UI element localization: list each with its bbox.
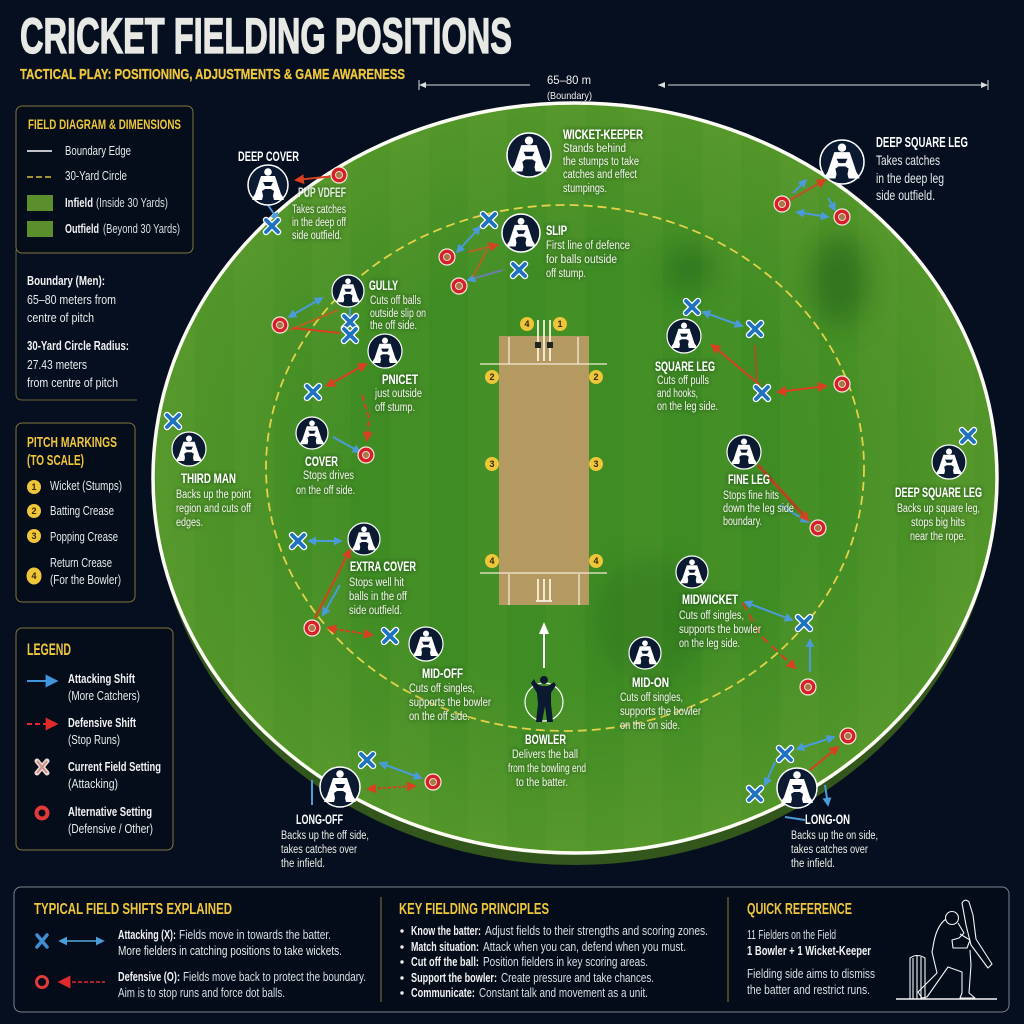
typical field shifts: Attacking (X):: [118, 927, 176, 942]
key fielding principles: [399, 901, 708, 1000]
panel: pitch markings: Return Crease: [50, 555, 112, 570]
quick reference: QUICK REFERENCE: [747, 901, 852, 918]
typical field shifts: TYPICAL FIELD SHIFTS EXPLAINED: [34, 901, 232, 918]
quick reference: 11 Fielders on the Field: [747, 927, 836, 942]
position: bowler: from the bowling end: [508, 763, 586, 775]
position: long-on: takes catches over: [791, 844, 868, 856]
panel: pitch markings: 3: [31, 531, 37, 541]
panel: field diagram and dimensions: 30-Yard Circle: [65, 168, 127, 183]
panel: pitch markings: 4: [31, 571, 37, 581]
panel: field diagram and dimensions: centre of pitch: [27, 310, 94, 325]
boundary dimension: 65–80 m: [547, 73, 591, 87]
pitch: [480, 317, 607, 605]
pitch number badges: 4: [524, 319, 530, 329]
panel: legend: LEGEND: [27, 640, 71, 659]
position: mid-on: on the on side.: [620, 720, 680, 732]
panel: field diagram and dimensions: from centre of pitch: [27, 375, 118, 390]
key fielding principles: Position fielders in key scoring areas.: [483, 954, 648, 969]
position: deep square leg (lower): DEEP SQUARE LEG: [895, 485, 982, 500]
position: cover: COVER: [305, 454, 338, 469]
position: mid-on: [620, 637, 701, 732]
position: slip: for balls outside: [546, 254, 617, 266]
panel: pitch markings: Batting Crease: [50, 503, 114, 518]
position: gully: [332, 275, 426, 332]
fielding markers: current setting X: [167, 214, 974, 800]
panel: field diagram and dimensions: 65–80 meters from: [27, 292, 116, 307]
subtitle: TACTICAL PLAY: POSITIONING, ADJUSTMENTS & GAME AWARENESS: [20, 66, 405, 83]
position: third man: region and cuts off: [176, 503, 252, 515]
position: wicket-keeper: the stumps to take: [563, 156, 639, 168]
position: extra cover: [348, 523, 416, 617]
position: bowler: BOWLER: [525, 732, 566, 747]
position: square leg: SQUARE LEG: [655, 359, 715, 374]
stumps: [535, 320, 553, 601]
position: gully: GULLY: [369, 278, 398, 293]
quick reference: 1 Bowler + 1 Wicket-Keeper: [747, 943, 871, 958]
position: wicket-keeper: [507, 127, 643, 195]
position: deep square leg (lower): [895, 445, 982, 543]
key fielding principles: Support the bowler:: [411, 970, 497, 985]
position: extra cover: Stops well hit: [349, 577, 405, 589]
panel: field diagram and dimensions: Outfield: [65, 221, 99, 236]
panel: field diagram and dimensions: [16, 106, 193, 400]
pitch number badges: 2: [489, 372, 495, 382]
key fielding principles: Know the batter:: [411, 923, 481, 938]
position: wicket-keeper: stumpings.: [563, 183, 607, 195]
position: deep cover: DEEP COVER: [238, 149, 299, 164]
panel: legend: [16, 628, 173, 850]
panel: field diagram and dimensions: (Inside 30 Yards): [96, 195, 168, 210]
panel: legend: Attacking Shift: [68, 671, 135, 686]
panel: field diagram and dimensions: Infield: [65, 195, 93, 210]
position: mid-on: Cuts off singles,: [620, 692, 683, 704]
panel: legend: (Stop Runs): [68, 732, 120, 747]
position: long-on: [777, 768, 878, 870]
quick reference: Fielding side aims to dismiss: [747, 966, 875, 981]
position: long-off: [281, 767, 369, 870]
position: point: [368, 334, 422, 414]
position: midwicket: Cuts off singles,: [679, 610, 744, 622]
position: deep square leg (lower): near the rope.: [910, 531, 966, 543]
position: deep cover: Takes catches: [292, 204, 346, 216]
panel: pitch markings: PITCH MARKINGS: [27, 434, 117, 451]
position: long-off: Backs up the off side,: [281, 830, 369, 842]
position: extra cover: side outfield.: [349, 605, 402, 617]
pitch number badges: 4: [489, 556, 495, 566]
position: midwicket: MIDWICKET: [682, 592, 739, 607]
position: long-on: Backs up the on side,: [791, 830, 878, 842]
pitch number badges: 2: [593, 372, 599, 382]
position: square leg: and hooks,: [657, 388, 698, 400]
typical field shifts: Fields move back to protect the boundary.: [183, 969, 366, 984]
panel: bottom explanation bar: [14, 887, 1009, 1012]
typical field shifts: Defensive (O):: [118, 969, 180, 984]
panel: legend: Current Field Setting: [68, 759, 161, 774]
position: mid-off: supports the bowler: [409, 697, 491, 709]
position: bowler: [508, 676, 586, 789]
position: deep square leg (lower): Backs up square leg,: [897, 503, 980, 515]
position: wicket-keeper: WICKET-KEEPER: [563, 127, 643, 142]
panel: field diagram and dimensions: FIELD DIAGRAM & DIMENSIONS: [28, 117, 181, 132]
position: slip: SLIP: [546, 223, 567, 238]
panel: legend: (More Catchers): [68, 688, 140, 703]
position: square leg: [655, 319, 718, 413]
position: wicket-keeper: catches and effect: [563, 169, 638, 181]
panel: legend: (Defensive / Other): [68, 821, 153, 836]
position: long-on: LONG-ON: [805, 812, 850, 827]
fielding markers: alternative setting O: [272, 167, 856, 790]
pitch number badges: 1: [557, 319, 563, 329]
position: fine leg: FINE LEG: [728, 472, 770, 487]
position: slip: First line of defence: [546, 240, 630, 252]
panel: field diagram and dimensions: Boundary (Men):: [27, 273, 105, 288]
panel: field diagram and dimensions: Boundary Edge: [65, 143, 131, 158]
position: fine leg: [723, 435, 794, 528]
position: third man: edges.: [176, 517, 203, 529]
quick reference: the batter and restrict runs.: [747, 982, 870, 997]
position: gully: the off side.: [370, 320, 417, 332]
pitch number badges: 4: [593, 556, 599, 566]
position: fine leg: down the leg side: [723, 503, 794, 515]
panel: pitch markings: 1: [31, 482, 37, 492]
position: midwicket: [676, 556, 761, 650]
position: mid-on: MID-ON: [632, 675, 669, 690]
key fielding principles: Attack when you can, defend when you must.: [483, 939, 686, 954]
position: slip: [502, 214, 630, 280]
panel: pitch markings: (For the Bowler): [50, 572, 121, 587]
quick reference: [747, 901, 875, 997]
position: point: PNICET: [382, 372, 419, 387]
position: deep cover: PUP VDFEF: [298, 185, 346, 200]
panel: legend: Defensive Shift: [68, 715, 136, 730]
pitch number badges: 3: [489, 459, 495, 469]
position: mid-off: Cuts off singles,: [409, 683, 475, 695]
panel: pitch markings: [16, 423, 135, 602]
position: cover: [296, 417, 355, 497]
key fielding principles: Adjust fields to their strengths and scoring zones.: [485, 923, 708, 938]
panel: legend: Alternative Setting: [68, 804, 152, 819]
position: long-off: LONG-OFF: [296, 812, 343, 827]
boundary dimension: [419, 73, 988, 102]
position: mid-off: on the off side.: [409, 711, 470, 723]
position: long-off: the infield.: [281, 858, 325, 870]
key fielding principles: KEY FIELDING PRINCIPLES: [399, 901, 549, 918]
position: point: just outside: [374, 388, 422, 400]
position: gully: outside slip on: [370, 308, 426, 320]
position: deep square leg (upper): DEEP SQUARE LEG: [876, 134, 968, 151]
position: fine leg: boundary.: [723, 516, 762, 528]
pitch number badges: [485, 317, 603, 568]
pitch number badges: 3: [593, 459, 599, 469]
position: bowler: to the batter.: [516, 777, 568, 789]
position: gully: Cuts off balls: [370, 295, 421, 307]
position: extra cover: balls in the off: [349, 591, 408, 603]
panel: field diagram and dimensions: 27.43 meters: [27, 357, 87, 372]
position: extra cover: EXTRA COVER: [350, 559, 416, 574]
position: third man: [172, 432, 252, 529]
position: deep cover: side outfield.: [292, 230, 342, 242]
position: third man: THIRD MAN: [181, 471, 236, 486]
position: long-off: takes catches over: [281, 844, 357, 856]
key fielding principles: Cut off the ball:: [411, 954, 479, 969]
panel: field diagram and dimensions: (Beyond 30 Yards): [103, 221, 180, 236]
key fielding principles: Communicate:: [411, 985, 475, 1000]
position: point: off stump.: [375, 402, 415, 414]
position: deep square leg (lower): stops big hits: [911, 517, 965, 529]
position: midwicket: on the leg side.: [679, 638, 740, 650]
position: deep cover: [238, 149, 347, 242]
position: deep square leg (upper): side outfield.: [876, 187, 935, 203]
panel: legend: (Attacking): [68, 776, 118, 791]
bowling direction arrow: [539, 622, 549, 668]
position: deep square leg (upper): in the deep leg: [876, 170, 944, 186]
position: deep square leg (upper): [820, 134, 968, 203]
typical field shifts: Fields move in towards the batter.: [179, 927, 331, 942]
position: bowler: Delivers the ball: [512, 749, 578, 761]
panel: pitch markings: 2: [31, 506, 37, 516]
position: cover: Stops drives: [303, 470, 354, 482]
position: cover: on the off side.: [296, 485, 355, 497]
position: square leg: on the leg side.: [657, 401, 718, 413]
position: long-on: the infield.: [791, 858, 835, 870]
boundary dimension: (Boundary): [547, 90, 592, 102]
typical field shifts: [34, 901, 366, 1000]
position: mid-off: [409, 627, 491, 723]
panel: field diagram and dimensions: 30-Yard Circle Radius:: [27, 338, 129, 353]
key fielding principles: Create pressure and take chances.: [501, 970, 654, 985]
30-yard circle: [266, 205, 864, 731]
panel: pitch markings: Popping Crease: [50, 529, 118, 544]
position: wicket-keeper: Stands behind: [563, 143, 626, 155]
position: deep square leg (upper): Takes catches: [876, 152, 940, 168]
cricket field: [153, 103, 997, 865]
typical field shifts: Aim is to stop runs and force dot balls.: [118, 985, 285, 1000]
position: midwicket: supports the bowler: [679, 624, 761, 636]
title: CRICKET FIELDING POSITIONS: [20, 8, 512, 64]
position: deep cover: in the deep off: [292, 217, 347, 229]
typical field shifts: More fielders in catching positions to take wickets.: [118, 943, 342, 958]
position: mid-on: supports the bowler: [620, 706, 701, 718]
field shift arrows: [268, 176, 838, 820]
key fielding principles: Constant talk and movement as a unit.: [479, 985, 648, 1000]
key fielding principles: Match situation:: [411, 939, 479, 954]
position: third man: Backs up the point: [176, 489, 252, 501]
position: fine leg: Stops fine hits: [723, 490, 779, 502]
position: mid-off: MID-OFF: [422, 666, 463, 681]
panel: pitch markings: (TO SCALE): [27, 452, 84, 469]
panel: pitch markings: Wicket (Stumps): [50, 478, 122, 493]
icon: batsman: [896, 900, 997, 999]
position: square leg: Cuts off pulls: [657, 375, 709, 387]
position: slip: off stump.: [546, 268, 586, 280]
